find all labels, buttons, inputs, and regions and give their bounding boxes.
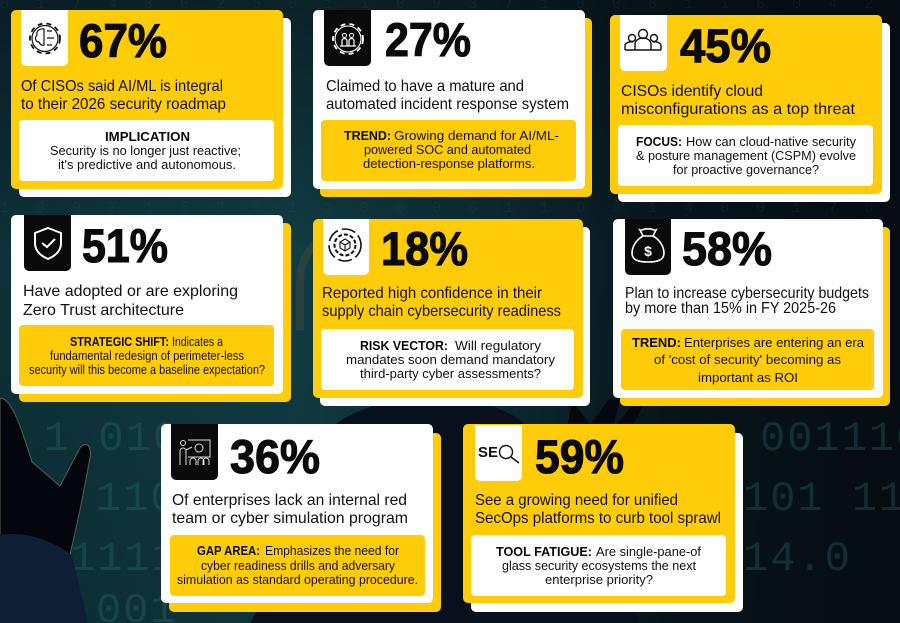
callout: gap area xyxy=(170,535,425,596)
callout: strategic shift: STRATEGIC SHIFT: xyxy=(70,334,169,349)
callout: tool fatigue xyxy=(471,535,726,596)
description: Reported high confidence in their xyxy=(322,285,543,302)
description: Plan to increase cybersecurity budgets xyxy=(625,285,869,302)
stat: 67% xyxy=(79,14,167,67)
card: 51% xyxy=(11,215,291,402)
stat: 45% xyxy=(680,19,771,72)
icon: group of people xyxy=(620,15,667,71)
description: automated incident response system xyxy=(326,96,569,113)
icon: money bag: $ xyxy=(644,243,652,259)
description: Claimed to have a mature and xyxy=(326,78,524,95)
callout: strategic shift: fundamental redesign of perimeter-less xyxy=(50,348,244,363)
callout: trend: TREND: xyxy=(632,335,681,350)
description: Of enterprises lack an internal red xyxy=(172,492,407,509)
callout: trend: Enterprises are entering an era xyxy=(684,335,865,350)
description: SecOps platforms to curb tool sprawl xyxy=(475,510,721,527)
callout: risk vector: RISK VECTOR: xyxy=(360,338,448,353)
icon: supply chain gear xyxy=(323,219,369,275)
stat: 18% xyxy=(381,222,468,275)
description: Have adopted or are exploring xyxy=(23,283,238,300)
callout: risk vector: mandates soon demand mandatory xyxy=(346,352,555,367)
callout: gap area: cyber readiness drills and adversary xyxy=(201,558,395,573)
description xyxy=(326,78,569,113)
callout: implication: it's predictive and autonomous. xyxy=(58,157,236,172)
icon: AI brain gear xyxy=(21,10,68,66)
callout: strategic shift: Indicates a xyxy=(172,334,224,349)
callout: trend: Growing demand for AI/ML- xyxy=(394,128,559,143)
stat: 51% xyxy=(82,219,168,272)
icon: money bag xyxy=(625,219,671,275)
description: CISOs identify cloud xyxy=(621,83,763,100)
large binary digits: 110 xyxy=(96,475,178,523)
callout: trend: of 'cost of security' becoming as xyxy=(654,352,841,367)
stat: 27% xyxy=(385,13,471,66)
card: 36% xyxy=(161,424,441,612)
callout: risk vector: third-party cyber assessments? xyxy=(360,366,541,381)
callout: tool fatigue: enterprise priority? xyxy=(545,572,653,587)
description: team or cyber simulation program xyxy=(172,510,408,527)
callout: gap area: simulation as standard operating procedure. xyxy=(177,572,418,587)
callout: trend xyxy=(621,329,874,390)
background: dark binary code scene: 1 0 0 7 1 5 8 0 1 1 3 0 0 6 1 1 0 9 1 4 0 0 1 7 0 1 xyxy=(0,200,900,217)
description xyxy=(322,285,561,320)
large binary digits: 14.0 xyxy=(743,535,852,583)
card: 18% xyxy=(313,219,590,406)
callout: trend: TREND: xyxy=(344,128,391,143)
callout: gap area: GAP AREA: xyxy=(197,543,260,558)
icon: SEO magnifier xyxy=(475,425,522,481)
callout: focus: How can cloud-native security xyxy=(686,134,856,149)
description xyxy=(172,492,408,527)
description: by more than 15% in FY 2025-26 xyxy=(625,300,836,317)
icon: SEO magnifier: SE xyxy=(478,444,498,461)
large binary digits: 1 010 xyxy=(44,415,180,463)
stat: 59% xyxy=(535,430,624,483)
right hand xyxy=(560,396,646,470)
callout: tool fatigue: glass security ecosystems the next xyxy=(502,558,696,573)
description: Of CISOs said AI/ML is integral xyxy=(21,78,223,95)
callout: gap area: Emphasizes the need for xyxy=(265,543,400,558)
description: misconfigurations as a top threat xyxy=(621,101,856,118)
callout: trend: important as ROI xyxy=(698,370,798,385)
large binary digits xyxy=(44,415,900,623)
description xyxy=(621,83,856,118)
description xyxy=(23,283,238,319)
card: 59% xyxy=(463,424,743,612)
icon: team gear xyxy=(324,10,371,66)
large binary digits: 1111 xyxy=(70,535,179,583)
callout: risk vector: Will regulatory xyxy=(455,338,541,353)
card: 27% xyxy=(313,10,592,197)
stat: 58% xyxy=(682,222,772,275)
description xyxy=(625,285,869,317)
description: to their 2026 security roadmap xyxy=(21,96,226,113)
callout: strategic shift: security will this become a baseline expectation? xyxy=(29,362,265,377)
description: See a growing need for unified xyxy=(475,492,678,509)
stat: 36% xyxy=(230,430,320,483)
left sleeve xyxy=(0,534,88,623)
callout: trend: detection-response platforms. xyxy=(363,156,535,171)
description: Zero Trust architecture xyxy=(23,302,184,319)
card: 58% xyxy=(613,219,890,406)
callout: focus: & posture management (CSPM) evolve xyxy=(636,148,856,163)
callout: focus xyxy=(618,125,873,186)
callout: implication: Security is no longer just reactive; xyxy=(50,143,241,158)
icon: shield check xyxy=(24,215,71,271)
callout: trend: powered SOC and automated xyxy=(364,142,531,157)
description xyxy=(475,492,721,527)
callout: focus: FOCUS: xyxy=(636,134,682,149)
callout: focus: for proactive governance? xyxy=(673,162,819,177)
callout: trend xyxy=(321,120,576,181)
callout: implication xyxy=(19,120,274,181)
icon: training presentation xyxy=(171,424,218,480)
description: supply chain cybersecurity readiness xyxy=(322,303,561,320)
left hand xyxy=(0,398,90,555)
card: 67% xyxy=(11,10,291,197)
callout: strategic shift xyxy=(19,325,274,386)
hooded figure xyxy=(250,398,640,623)
callout: tool fatigue: Are single-pane-of xyxy=(596,544,701,559)
card: 45% xyxy=(610,15,890,202)
callout: tool fatigue: TOOL FATIGUE: xyxy=(496,544,592,559)
description xyxy=(21,78,226,113)
callout: implication: IMPLICATION xyxy=(105,129,190,144)
lock outline behind cards xyxy=(300,230,400,330)
callout: risk vector xyxy=(321,329,574,390)
